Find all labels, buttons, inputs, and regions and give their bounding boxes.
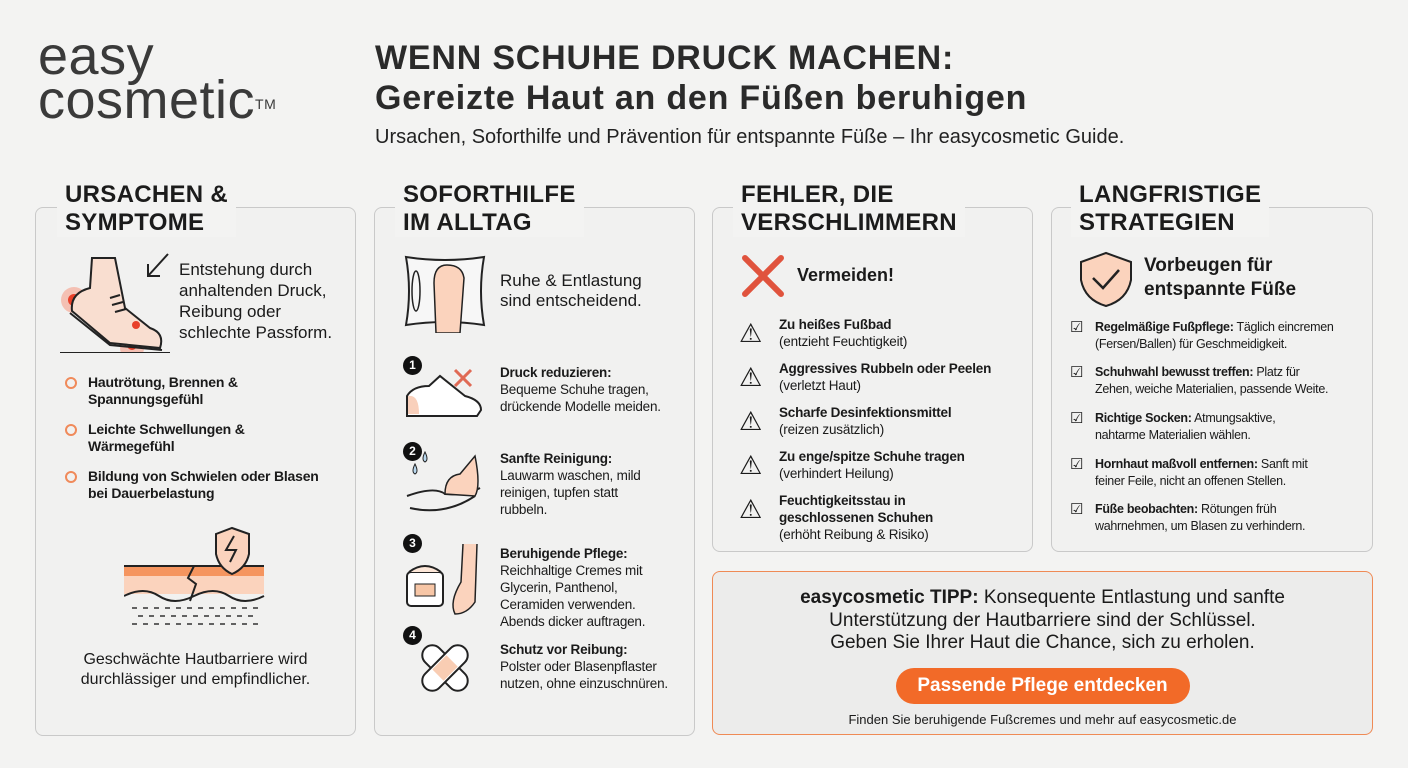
icon: arrow: [147, 253, 169, 277]
text: Entstehung: anhaltenden Druck,: [179, 281, 326, 300]
item 3: Glycerin, Panthenol,: [500, 580, 618, 595]
mistakes list: (verletzt Haut): [779, 378, 861, 393]
strategy list: Richtige Socken: Atmungsaktive,: [1095, 411, 1275, 425]
heading: Fehler, die verschlimmern: [733, 181, 965, 237]
heading: Langfristige Strategien: [1071, 181, 1269, 237]
text: Vorbeugen: [1144, 255, 1296, 300]
strategy list: feiner Feile, nicht an offenen Stellen.: [1095, 474, 1286, 488]
mistakes list: Scharfe Desinfektionsmittel: [779, 405, 951, 420]
text: Ruhe & Entlastung: Ruhe & Entlastung: [500, 271, 642, 290]
callout: easycosmetic tipp: [712, 571, 1373, 735]
strategy list: Hornhaut maßvoll entfernen: Sanft mit: [1095, 457, 1308, 471]
text: tipp: easycosmetic TIPP: Konsequente Entlastung und sanfte: [800, 587, 1285, 608]
icon: hand washing foot: [406, 451, 480, 512]
title: [375, 39, 1027, 117]
item 3: Ceramiden verwenden.: [500, 597, 636, 612]
mistakes list: ⚠: [739, 318, 762, 348]
icon: cream jar and foot: [406, 544, 478, 615]
mistakes list: (reizen zusätzlich): [779, 422, 884, 437]
strategy list: Regelmäßige Fußpflege: Täglich eincremen: [1095, 320, 1334, 334]
text: Vorbeugen: Vorbeugen für: [1144, 255, 1272, 276]
item 4: nutzen, ohne einzuschnüren.: [500, 676, 668, 691]
text: Entstehung: schlechte Passform.: [179, 323, 332, 342]
panel: Langfristige Strategien: [1051, 207, 1373, 552]
button: Passende Pflege entdecken: [917, 674, 1168, 696]
strategy list: (Fersen/Ballen) für Geschmeidigkeit.: [1095, 337, 1287, 351]
mistakes list: [739, 317, 991, 542]
item 1: Bequeme Schuhe tragen,: [500, 382, 649, 397]
item 3: Beruhigende Pflege:: [500, 546, 627, 561]
text: Hautbarriere caption: [81, 651, 310, 688]
text: Entstehung: Entstehung durch: [179, 260, 312, 279]
item 4: [403, 626, 668, 692]
text: Entstehung: [179, 260, 332, 342]
symptom list: Leichte Schwellungen &: [88, 421, 245, 437]
panel: Soforthilfe im Alltag: [374, 207, 695, 736]
panel: Soforthilfe im Alltag: Abends dicker auftragen.: [500, 614, 645, 629]
icon: shield with check: [1080, 252, 1132, 307]
item 4: Polster oder Blasenpflaster: [500, 659, 657, 674]
subtitle: Ursachen, Soforthilfe und Prävention für entspannte Füße – Ihr easycosmetic Guide.: [375, 126, 1124, 148]
mistakes list: ⚠: [739, 406, 762, 436]
panel: Fehler, die verschlimmern: [712, 207, 1033, 552]
symptom list: [65, 374, 319, 501]
title: Gereizte Haut an den Füßen beruhigen: [375, 79, 1027, 117]
mistakes list: ⚠: [739, 494, 762, 524]
icon: damaged skin barrier: [124, 526, 264, 625]
item 4: Schutz vor Reibung:: [500, 642, 627, 657]
text: Ruhe & Entlastung: sind entscheidend.: [500, 291, 642, 310]
item 2: rubbeln.: [500, 502, 547, 517]
heading: Fehler, die verschlimmern: VERSCHLIMMERN: [741, 209, 957, 236]
strategy list: ☑: [1070, 364, 1083, 381]
text: tipp: [800, 587, 1285, 653]
symptom list: Bildung von Schwielen oder Blasen: [88, 468, 319, 484]
mistakes list: Feuchtigkeitsstau in: [779, 493, 906, 508]
strategy list: Schuhwahl bewusst treffen: Platz für: [1095, 365, 1300, 379]
text: tipp: Unterstützung der Hautbarriere sind der Schlüssel.: [829, 610, 1256, 630]
logo: easy: [38, 26, 154, 86]
heading: Soforthilfe im Alltag: IM ALLTAG: [403, 209, 532, 236]
heading: Ursachen & Symptome: [57, 181, 236, 237]
item 2: [403, 442, 641, 517]
strategy list: ☑: [1070, 410, 1083, 427]
title: WENN SCHUHE DRUCK MACHEN:: [375, 39, 954, 77]
mistakes list: ⚠: [739, 450, 762, 480]
heading: Langfristige Strategien: LANGFRISTIGE: [1079, 181, 1261, 208]
symptom list: Wärmegefühl: [88, 438, 174, 454]
icon: shoe with x: [406, 369, 482, 417]
mistakes list: (entzieht Feuchtigkeit): [779, 334, 907, 349]
text: Ruhe & Entlastung: [500, 271, 642, 310]
icon: plaster: [421, 644, 469, 692]
mistakes list: Aggressives Rubbeln oder Peelen: [779, 361, 991, 376]
heading: Ursachen & Symptome: URSACHEN &: [65, 181, 228, 208]
icon: red X: [742, 255, 784, 297]
strategy list: nahtarme Materialien wählen.: [1095, 428, 1251, 442]
icon: shoe with pressure points: [60, 257, 170, 353]
logo: [38, 26, 276, 130]
item 2: Sanfte Reinigung:: [500, 451, 612, 466]
item 1: drückende Modelle meiden.: [500, 399, 661, 414]
strategy list: ☑: [1070, 319, 1083, 336]
item 4: 4: [409, 628, 416, 642]
item 2: Lauwarm waschen, mild: [500, 468, 641, 483]
mistakes list: ⚠: [739, 362, 762, 392]
symptom list: bei Dauerbelastung: [88, 485, 214, 501]
strategy list: Füße beobachten: Rötungen früh: [1095, 502, 1276, 516]
symptom list: Spannungsgefühl: [88, 391, 203, 407]
logo: cosmeticTM: [38, 70, 276, 130]
strategy list: ☑: [1070, 456, 1083, 473]
item 1: 1: [409, 358, 416, 372]
item 3: 3: [409, 536, 416, 550]
text: Hautbarriere caption: Geschwächte Hautbarriere wird: [83, 651, 308, 668]
item 2: reinigen, tupfen statt: [500, 485, 618, 500]
strategy list: Zehen, weiche Materialien, passende Weite.: [1095, 382, 1328, 396]
mistakes list: (erhöht Reibung & Risiko): [779, 527, 929, 542]
icon: foot on pillow: [404, 256, 486, 333]
text: Vorbeugen: entspannte Füße: [1144, 279, 1296, 300]
mistakes list: Zu enge/spitze Schuhe tragen: [779, 449, 965, 464]
mistakes list: Zu heißes Fußbad: [779, 317, 891, 332]
heading: Langfristige Strategien: STRATEGIEN: [1079, 209, 1235, 236]
item 2: 2: [409, 444, 416, 458]
item 3: [403, 534, 645, 629]
text: Hautbarriere caption: durchlässiger und empfindlicher.: [81, 671, 310, 688]
item 3: Reichhaltige Cremes mit: [500, 563, 642, 578]
item 1: [403, 356, 661, 417]
mistakes list: (verhindert Heilung): [779, 466, 894, 481]
symptom list: Hautrötung, Brennen &: [88, 374, 238, 390]
text: Vermeiden: Vermeiden!: [797, 265, 894, 285]
heading: Ursachen & Symptome: SYMPTOME: [65, 209, 204, 236]
strategy list: ☑: [1070, 501, 1083, 518]
text: Entstehung: Reibung oder: [179, 302, 281, 321]
mistakes list: geschlossenen Schuhen: [779, 510, 933, 525]
strategy list: wahrnehmen, um Blasen zu verhindern.: [1095, 519, 1305, 533]
heading: Soforthilfe im Alltag: SOFORTHILFE: [403, 181, 576, 208]
heading: Soforthilfe im Alltag: [395, 181, 584, 237]
strategy list: [1070, 319, 1334, 533]
footer text: Finden Sie beruhigende Fußcremes und mehr auf easycosmetic.de: [848, 712, 1237, 726]
panel: Ursachen & Symptome: [35, 207, 356, 736]
button: [896, 668, 1190, 704]
item 1: Druck reduzieren:: [500, 365, 611, 380]
heading: Fehler, die verschlimmern: FEHLER, DIE: [741, 181, 894, 208]
text: tipp: Geben Sie Ihrer Haut die Chance, sich zu erholen.: [830, 632, 1255, 653]
